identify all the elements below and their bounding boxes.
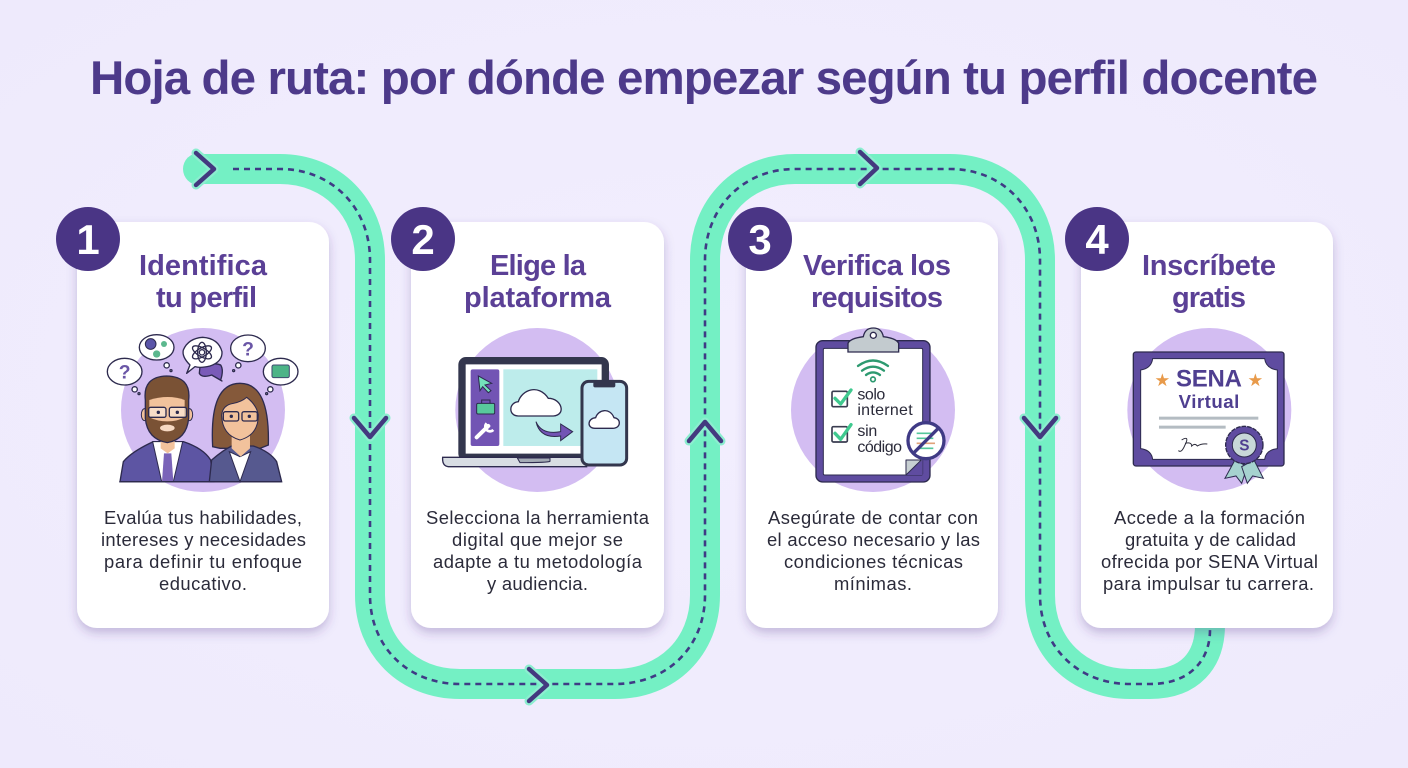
heading: step 2: Elige la (490, 250, 587, 282)
text block: step 2: Selecciona la herramienta (426, 507, 650, 528)
badge 4 (1065, 207, 1129, 271)
text block: step 4: gratuita y de calidad (1125, 529, 1296, 550)
woman (212, 383, 268, 448)
badge 2: 2 (411, 216, 435, 263)
icon: clipboard checklist: código (857, 439, 902, 456)
text block: step 2: adapte a tu metodología (433, 551, 643, 572)
panel: step 3 (728, 207, 998, 628)
icon: SENA Virtual certificate: S (1239, 438, 1249, 455)
text block: step 1 (101, 507, 306, 594)
arrow chevrons on the road (196, 152, 1056, 701)
icon: two teachers thinking: ? (119, 363, 131, 384)
badge 4: 4 (1085, 216, 1109, 263)
panel: step 1 (56, 207, 329, 628)
text block: step 2: digital que mejor se (452, 529, 623, 550)
text block: step 1: educativo. (159, 573, 247, 594)
text block: step 3 (767, 507, 980, 594)
heading: step 4: gratis (1172, 282, 1246, 314)
heading: step 1: Identifica (139, 250, 268, 282)
badge 3: 3 (748, 216, 772, 263)
icon: two teachers thinking (107, 328, 298, 492)
icon: clipboard checklist: sin (857, 423, 877, 440)
heading: step 4: Inscríbete (1142, 250, 1276, 282)
panel: step 2 (391, 207, 664, 628)
text block: step 1: Evalúa tus habilidades, (104, 507, 302, 528)
winding road path (183, 153, 1210, 684)
panel: step 4 (1065, 207, 1333, 628)
heading: step 2 (464, 250, 612, 314)
heading: step 3: requisitos (811, 282, 943, 314)
text block: step 1: para definir tu enfoque (104, 551, 302, 572)
text block: step 4: Accede a la formación (1114, 507, 1305, 528)
text block: step 4 (1101, 507, 1318, 594)
text block: step 4: ofrecida por SENA Virtual (1101, 551, 1318, 572)
text block: step 3: condiciones técnicas (784, 551, 963, 572)
icon: SENA Virtual certificate: ★ (1155, 370, 1170, 390)
icon: laptop and phone (443, 328, 627, 492)
icon: SENA Virtual certificate: SENA (1176, 366, 1242, 393)
heading: step 1 (139, 250, 268, 314)
text block: step 2: y audiencia. (487, 573, 588, 594)
heading: step 3 (803, 250, 951, 314)
heading: step 1: tu perfil (156, 282, 257, 314)
text block: step 4: para impulsar tu carrera. (1103, 573, 1314, 594)
icon: clipboard checklist: solo (857, 386, 885, 403)
badge 3 (728, 207, 792, 271)
man (120, 442, 214, 482)
icon: SENA Virtual certificate (1127, 328, 1291, 492)
text block: step 3: mínimas. (834, 573, 912, 594)
heading: step 3: Verifica los (803, 250, 951, 282)
icon: clipboard checklist (791, 328, 955, 492)
text block: step 2 (426, 507, 650, 594)
badge 2 (391, 207, 455, 271)
icon: SENA Virtual certificate: Virtual (1179, 391, 1239, 412)
icon: clipboard checklist: internet (857, 402, 913, 419)
text block: step 1: intereses y necesidades (101, 529, 306, 550)
heading: step 4 (1142, 250, 1276, 314)
badge 1: 1 (76, 216, 100, 263)
text block: step 3: el acceso necesario y las (767, 529, 980, 550)
icon: two teachers thinking: ? (242, 339, 254, 360)
text block: step 3: Asegúrate de contar con (768, 507, 978, 528)
heading: step 2: plataforma (464, 282, 612, 314)
title: Hoja de ruta: por dónde empezar según tu perfil docente (90, 52, 1318, 105)
icon: SENA Virtual certificate: ★ (1248, 370, 1263, 390)
badge 1 (56, 207, 120, 271)
